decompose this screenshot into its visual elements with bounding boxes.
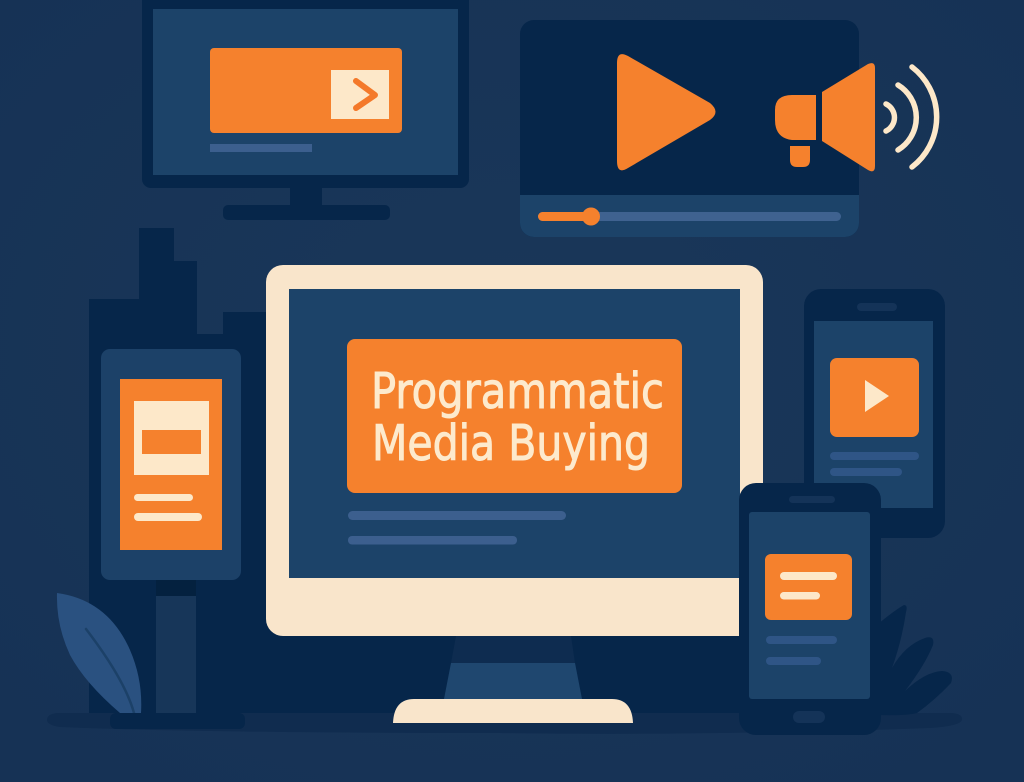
monitor screen (153, 9, 458, 175)
message ad card (765, 554, 852, 620)
title text: Media Buying (372, 415, 650, 472)
text placeholder lines (348, 511, 566, 544)
back phone speaker (857, 303, 897, 311)
title text (371, 363, 664, 472)
play icon (617, 54, 716, 170)
kiosk body (101, 349, 241, 580)
front phone screen (749, 512, 870, 699)
front phone lines (766, 636, 837, 665)
title text: Programmatic (371, 363, 664, 420)
front phone speaker (789, 496, 835, 503)
left phone kiosk (101, 349, 245, 729)
player control bar (520, 195, 859, 237)
main monitor (266, 265, 763, 723)
caption line (210, 144, 312, 152)
player body (520, 20, 859, 237)
top monitor (142, 0, 469, 220)
back phone lines (830, 452, 919, 476)
plant: right leaves (878, 605, 952, 715)
main monitor frame (266, 265, 763, 636)
monitor stand (223, 185, 390, 220)
banner ad (210, 48, 402, 133)
back phone (804, 289, 945, 538)
front phone body (739, 483, 881, 735)
back phone body (804, 289, 945, 538)
city skyline silhouette (89, 228, 745, 713)
video ad card (830, 358, 919, 437)
kiosk orange ad (120, 379, 222, 550)
main monitor screen (289, 289, 740, 578)
kiosk stand (110, 578, 245, 729)
plant: left leaf (57, 593, 141, 713)
ground shadow (47, 713, 962, 734)
title banner (347, 339, 682, 493)
icon: megaphone (775, 63, 937, 171)
front phone (739, 483, 881, 735)
back phone screen (814, 321, 933, 508)
sound waves (886, 67, 937, 167)
monitor frame (142, 0, 469, 188)
main monitor stand (393, 636, 633, 723)
progress track (538, 212, 841, 221)
progress fill (538, 208, 600, 226)
front phone home button (793, 711, 825, 723)
video player (520, 20, 859, 237)
